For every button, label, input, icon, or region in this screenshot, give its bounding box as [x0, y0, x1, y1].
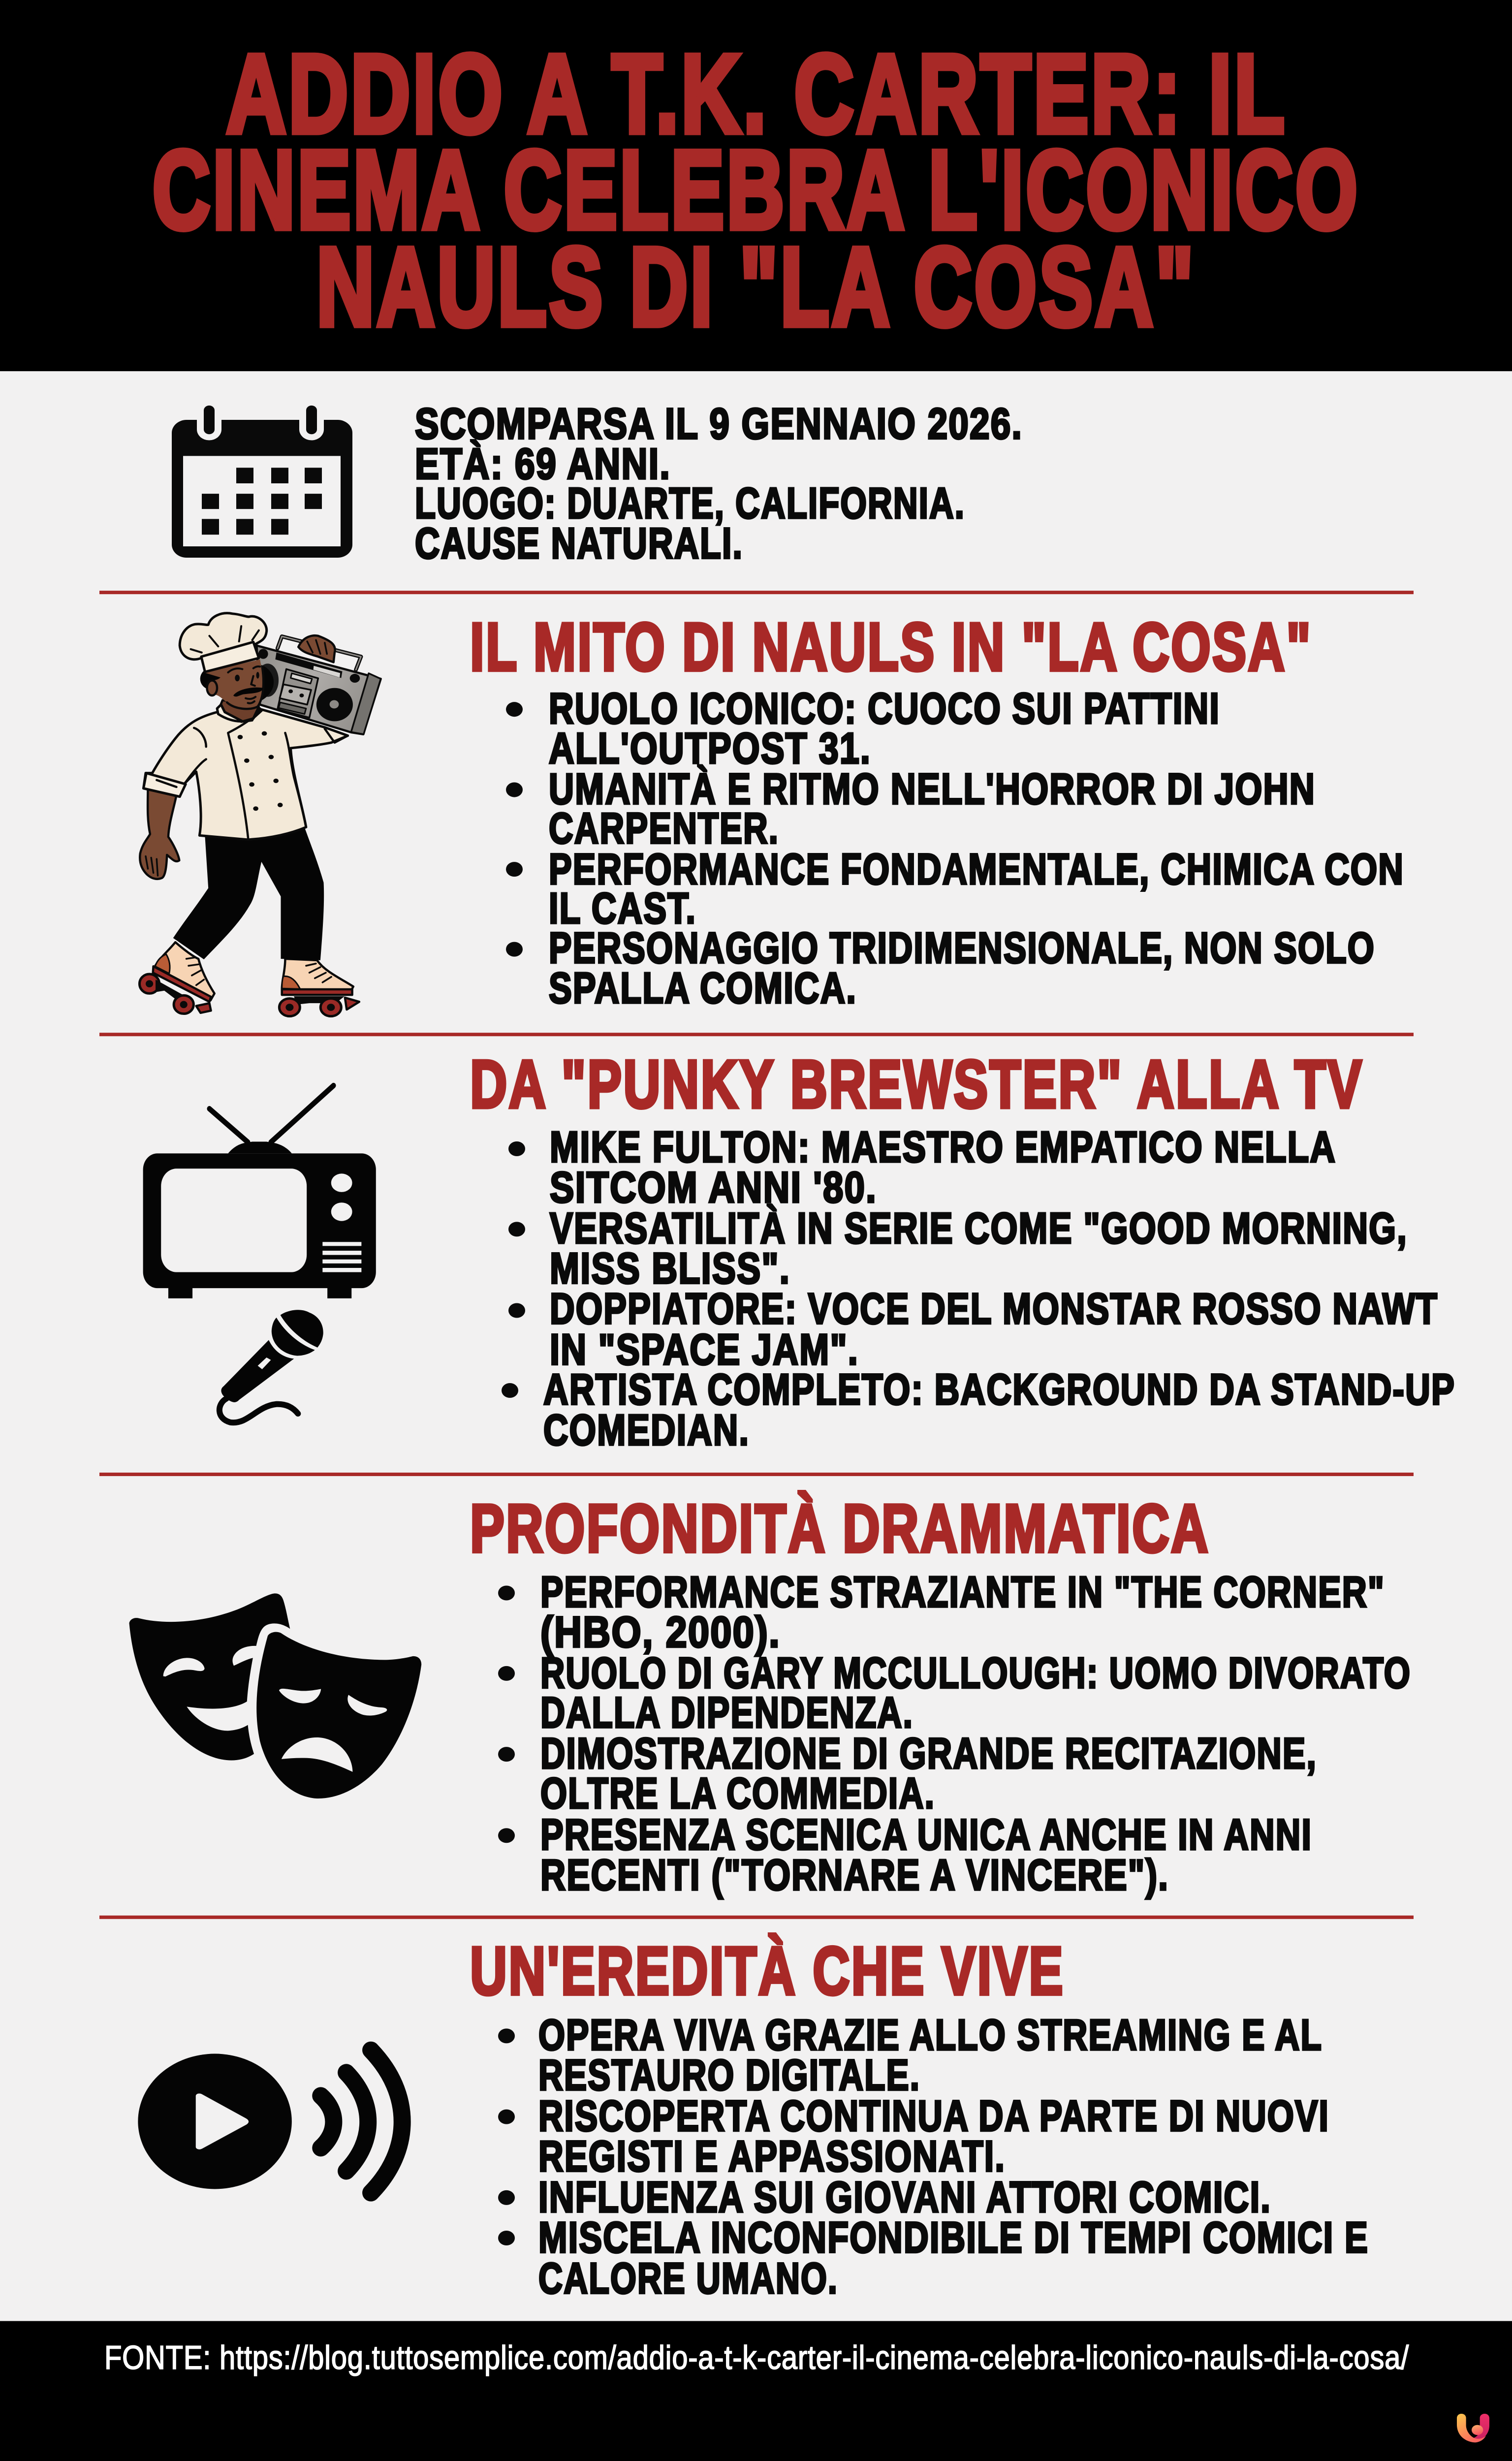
jacket buttons — [238, 731, 283, 811]
heading: UN'EREDITÀ CHE VIVE — [470, 1933, 1065, 2009]
bullet list: RECENTI ("TORNARE A VINCERE"). — [540, 1851, 1169, 1899]
bullet list: DALLA DIPENDENZA. — [540, 1688, 914, 1736]
trousers — [173, 828, 324, 960]
boombox — [256, 635, 381, 734]
bullet list: OLTRE LA COMMEDIA. — [540, 1769, 935, 1817]
bullet list: ALL'OUTPOST 31. — [549, 724, 871, 772]
bullet list — [506, 684, 1404, 1012]
icon: microphone — [220, 1310, 323, 1422]
hair — [261, 665, 274, 700]
bullet list: COMEDIAN. — [543, 1406, 750, 1454]
bullet list: SITCOM ANNI '80. — [550, 1163, 877, 1211]
bullet list: REGISTI E APPASSIONATI. — [538, 2132, 1006, 2180]
bullet list: RESTAURO DIGITALE. — [538, 2051, 920, 2099]
bullet list — [498, 2011, 1369, 2303]
facts text: ETÀ: 69 ANNI. — [415, 440, 671, 488]
bullet list — [502, 1123, 1455, 1454]
icon: logo — [1457, 2414, 1489, 2442]
icon: chef on roller skates with boombox — [139, 613, 381, 1016]
bullet list: IN "SPACE JAM". — [550, 1325, 859, 1374]
facts text: LUOGO: DUARTE, CALIFORNIA. — [415, 479, 965, 527]
right skate — [279, 959, 359, 1016]
footer band — [0, 2321, 1512, 2461]
left arm — [140, 789, 179, 879]
chef jacket — [144, 709, 348, 840]
icon: calendar — [172, 406, 352, 558]
panel: key facts — [172, 399, 1023, 568]
panel: un'eredità che vive — [138, 1933, 1369, 2303]
bullet list: IL CAST. — [549, 884, 696, 932]
bullet list: SPALLA COMICA. — [549, 964, 857, 1012]
chef hat — [180, 613, 267, 660]
bullet list: CARPENTER. — [549, 804, 779, 852]
title — [153, 32, 1360, 349]
facts text: SCOMPARSA IL 9 GENNAIO 2026. — [415, 399, 1023, 448]
face — [204, 660, 263, 709]
bullet list: CALORE UMANO. — [538, 2254, 838, 2303]
panel: il mito di Nauls — [139, 609, 1404, 1016]
icon: theatre masks — [129, 1593, 421, 1798]
facts text: CAUSE NATURALI. — [415, 519, 743, 568]
bullet list — [498, 1568, 1411, 1899]
facts text — [415, 399, 1023, 568]
bullet list: (HBO, 2000). — [540, 1608, 781, 1656]
neck and collar — [218, 700, 259, 722]
panel: profondità drammatica — [129, 1491, 1411, 1899]
panel: da Punky Brewster alla TV — [143, 1047, 1455, 1454]
bullet list: RUOLO ICONICO: CUOCO SUI PATTINI — [549, 684, 1220, 732]
icon: retro television — [143, 1085, 376, 1298]
icon: play button with sound waves — [138, 2050, 402, 2193]
left skate — [139, 942, 215, 1014]
bullet list: MISS BLISS". — [550, 1244, 790, 1293]
header band — [0, 0, 1512, 371]
